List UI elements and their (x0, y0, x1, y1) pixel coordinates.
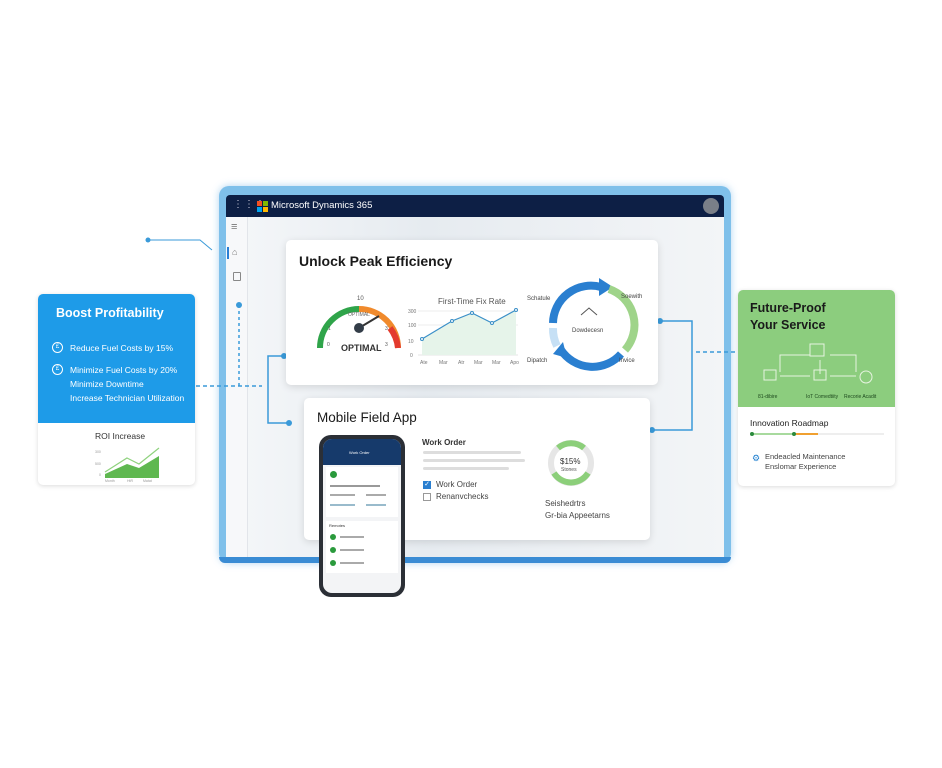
panel: Boost Profitability: HtR (127, 479, 134, 483)
panel: Boost Profitability: Matat (143, 479, 152, 483)
gauge: 3 (385, 326, 388, 332)
panel: Unlock Peak Efficiency: 10 (408, 339, 414, 345)
heading: Unlock Peak Efficiency (299, 253, 452, 269)
heading: Mobile Field App (317, 410, 417, 425)
work order form: Renanvchecks (436, 492, 488, 501)
cycle diagram: Dowdecesn (572, 328, 603, 334)
benefit list: Reduce Fuel Costs by 15% (70, 343, 173, 353)
panel: Future-Proof Your Service (738, 290, 895, 486)
tech diagram: IoT Comedtiity (806, 394, 839, 400)
panel: Future-Proof Your Service: Endeacled Maintenance (765, 452, 845, 461)
panel: Unlock Peak Efficiency: 100 (408, 323, 417, 329)
panel: Mobile Field App: Gr-bia Appeetarns (545, 511, 610, 520)
heading: Your Service (750, 318, 826, 332)
sidebar (226, 217, 248, 557)
cycle diagram: Invice (619, 358, 635, 364)
innovation roadmap: Innovation Roadmap (750, 418, 828, 428)
cycle diagram (527, 278, 642, 371)
line chart: First-Time Fix Rate: First-Time Fix Rate (438, 297, 506, 306)
phone mockup (319, 435, 405, 597)
panel: Boost Profitability: 500 (95, 462, 101, 466)
panel: Future-Proof Your Service: Enslomar Experience (765, 462, 836, 471)
panel: Boost Profitability: 0 (99, 473, 101, 477)
benefit list: Increase Technician Utilization (70, 393, 184, 403)
benefit list (52, 342, 184, 403)
panel: Boost Profitability (38, 294, 195, 485)
panel: Boost Profitability: Month (105, 479, 115, 483)
panel: Unlock Peak Efficiency: OPTIMAL (341, 343, 382, 353)
phone mockup: Work Order (349, 450, 370, 455)
panel: Unlock Peak Efficiency: 0 (410, 353, 413, 359)
cycle diagram: Soewith (621, 294, 642, 300)
dashboard frame (219, 186, 731, 563)
header bar (226, 195, 724, 217)
sidebar: ⌂ (232, 247, 237, 257)
icon: microsoft logo (257, 201, 268, 212)
gauge: 10 (357, 296, 364, 302)
gauge: 3 (385, 342, 388, 348)
panel: Boost Profitability: 300 (95, 450, 101, 454)
tech diagram: 81-dibire (758, 394, 778, 400)
benefit list: £ (56, 366, 59, 372)
panel: Unlock Peak Efficiency (286, 240, 658, 385)
cycle diagram: Schatule (527, 296, 551, 302)
gauge: 0 (327, 342, 330, 348)
benefit list: Minimize Fuel Costs by 20% (70, 365, 177, 375)
panel: Mobile Field App (304, 398, 650, 540)
header bar: Microsoft Dynamics 365 (271, 200, 372, 211)
cycle diagram: Dipatch (527, 358, 547, 364)
benefit list: £ (56, 344, 59, 350)
phone mockup: Remotes (329, 523, 345, 528)
ROI chart: ROI Increase (95, 431, 145, 441)
work order form: Work Order (436, 480, 477, 489)
gauge: OPTIMAL (348, 312, 370, 318)
panel: Future-Proof Your Service: ⚙ (752, 453, 760, 463)
donut chart (548, 440, 594, 486)
gauge (317, 296, 401, 348)
panel: Mobile Field App: Seishedrtrs (545, 499, 585, 508)
content area (226, 217, 724, 557)
gauge: 1 (328, 326, 331, 332)
donut chart: $15% (560, 457, 580, 466)
heading: Future-Proof (750, 301, 826, 315)
panel: Unlock Peak Efficiency: 300 (408, 309, 417, 315)
heading: Boost Profitability (56, 306, 164, 320)
donut chart: Stones (561, 467, 577, 473)
tech diagram: Recorie Acadit (844, 394, 877, 400)
tech diagram (758, 344, 877, 400)
work order form: Work Order (422, 438, 466, 447)
work order form (422, 438, 525, 501)
heading (750, 301, 826, 332)
sidebar: ≡ (231, 221, 237, 233)
work order form: ✓ (424, 481, 430, 488)
benefit list: Minimize Downtime (70, 379, 144, 389)
header bar: ⋮⋮⋮ (233, 199, 266, 210)
